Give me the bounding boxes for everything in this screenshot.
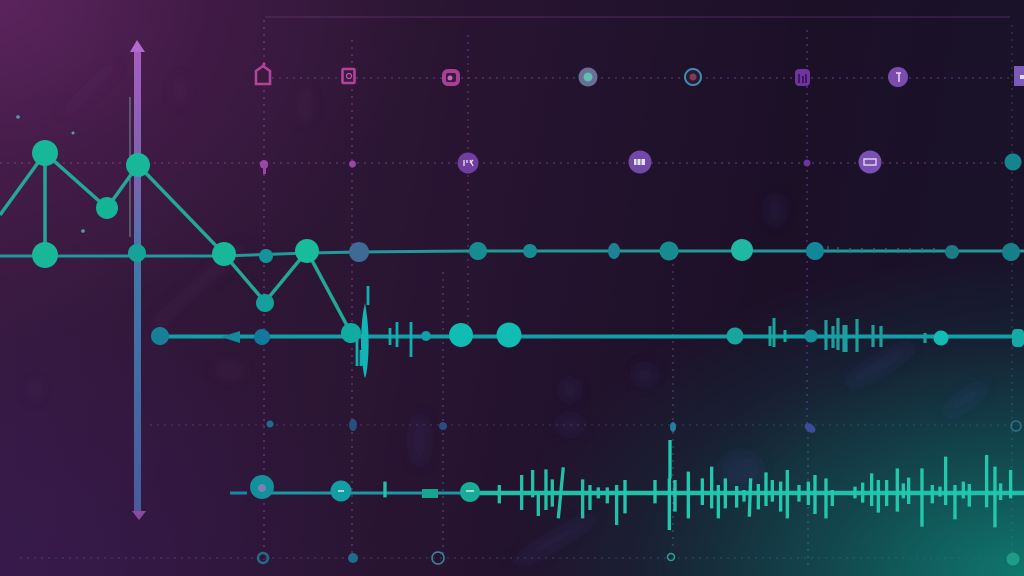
icon: purple badge one bbox=[458, 152, 478, 174]
vertical axis with arrows bbox=[130, 40, 146, 520]
waveform right bbox=[625, 440, 1011, 530]
nodes row two bbox=[151, 322, 1024, 348]
horizontal line row one bbox=[0, 251, 1024, 256]
icon: purple info circle bbox=[888, 67, 908, 87]
marker: pin bbox=[260, 160, 268, 174]
second row icons bbox=[260, 150, 1022, 174]
top row icons bbox=[256, 62, 1024, 87]
icon: edge tab bbox=[1014, 66, 1024, 86]
icon: house bbox=[256, 62, 270, 84]
waveform spikes bbox=[357, 286, 925, 366]
nodes upper bbox=[32, 140, 274, 312]
icon: ring badge bbox=[685, 69, 701, 85]
icon: purple badge two bbox=[628, 150, 652, 174]
icon: calendar square bbox=[342, 69, 354, 83]
marker: dot bbox=[349, 160, 356, 168]
top data line network bbox=[0, 140, 1024, 333]
ticks on row one bbox=[828, 246, 934, 253]
nodes row one bbox=[32, 239, 1020, 268]
icon: camera bbox=[442, 69, 460, 86]
icon: purple chart badge bbox=[795, 69, 810, 86]
icon: teal circle badge bbox=[578, 68, 598, 86]
arrow marker bbox=[221, 331, 240, 343]
spindle spike bbox=[361, 303, 369, 378]
marker: small purple dot bbox=[804, 160, 810, 166]
lower grid markers bbox=[258, 419, 1021, 566]
scattered dots bbox=[16, 115, 85, 233]
middle data line bbox=[151, 286, 1024, 378]
zigzag connector bbox=[0, 153, 351, 333]
icon: purple badge three bbox=[858, 150, 882, 174]
marker: teal dot bbox=[1004, 154, 1022, 170]
bottom waveform line bbox=[230, 440, 1024, 530]
nodes row three bbox=[250, 475, 480, 502]
waveform left bbox=[385, 467, 617, 525]
